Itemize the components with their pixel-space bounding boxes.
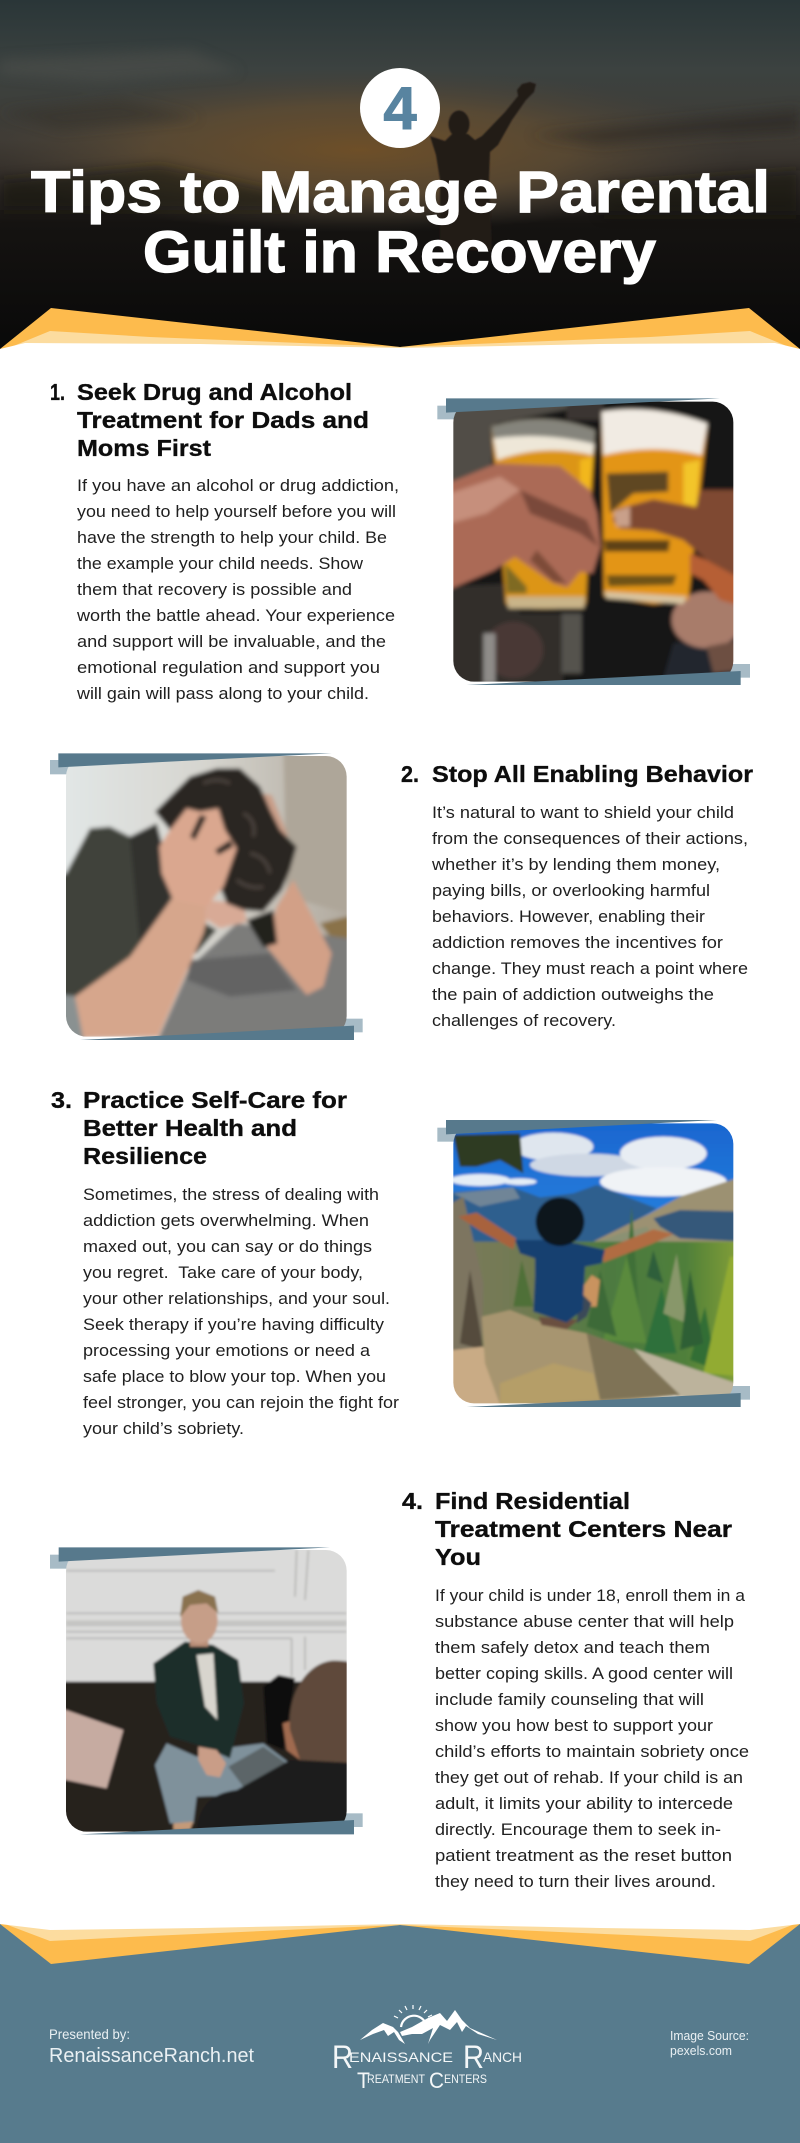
hero banner with photo background (0, 0, 800, 350)
photo: person with open arms on a rock facing mountains (437, 1113, 750, 1407)
panel: tip 4 text (402, 1488, 749, 1891)
tip 3 body text: safe place to blow your top. When you (83, 1368, 386, 1386)
tip 4 body text: they get out of rehab. If your child is an (435, 1769, 743, 1787)
person (458, 1213, 516, 1249)
hand (159, 808, 237, 907)
foot (173, 1822, 193, 1830)
footer: image source: Image Source: (670, 2028, 749, 2043)
tip 1 body text: worth the battle ahead. Your experience (76, 607, 395, 625)
tip 2 body text: whether it’s by lending them money, (431, 856, 720, 874)
right hand (613, 490, 743, 580)
tip 3 number: 3. (51, 1087, 72, 1113)
tip 2 body text (431, 804, 748, 1030)
footer: presented by: RenaissanceRanch.net (49, 2045, 254, 2067)
logo wordmark: ENTERS (444, 2074, 487, 2086)
logo wordmark: ANCH (483, 2049, 522, 2065)
tip 2 heading: Stop All Enabling Behavior (432, 761, 753, 787)
panel: tip 1 text (50, 379, 399, 703)
footer: image source (670, 2028, 749, 2058)
jacket (153, 1642, 244, 1758)
clouds (513, 1133, 593, 1161)
logo wordmark: C (429, 2068, 444, 2093)
tip 1 heading: Moms First (77, 435, 211, 461)
tip 1 heading: Seek Drug and Alcohol (77, 379, 352, 405)
tip 1 body text: them that recovery is possible and (77, 581, 352, 599)
tip 1 body text (76, 477, 399, 703)
logo wordmark: R (463, 2039, 484, 2075)
tip 3 body text: processing your emotions or need a (83, 1342, 371, 1360)
hands (198, 1747, 226, 1777)
left glass (492, 419, 595, 609)
tip 3 heading: Resilience (83, 1143, 207, 1169)
tip 1 body text: and support will be invaluable, and the (77, 633, 386, 651)
tip 4 body text (435, 1587, 749, 1891)
tip 4 body text: better coping skills. A good center will (435, 1665, 733, 1683)
ground (453, 1345, 502, 1404)
tip 3 heading: Better Health and (83, 1115, 297, 1141)
tip 4 heading (435, 1488, 732, 1570)
jeans (155, 1743, 290, 1823)
tip 1 body text: have the strength to help your child. Be (77, 529, 387, 547)
tip 1 heading: Treatment for Dads and (77, 407, 369, 433)
footer: image source: pexels.com (670, 2043, 732, 2058)
far arm (267, 880, 332, 995)
tip 3 body text: Seek therapy if you’re having difficulty (83, 1316, 385, 1334)
photo: young man on a sofa talking with a counselor (50, 1540, 363, 1840)
tip 4 number: 4. (402, 1488, 423, 1514)
tip 4 body text: them safely detox and teach them (435, 1639, 710, 1657)
tip 4 body text: include family counseling that will (435, 1691, 704, 1709)
tip 2 body text: challenges of recovery. (432, 1012, 616, 1030)
icon: sun and mountains (360, 2005, 497, 2044)
footer: presented by (49, 2026, 254, 2067)
tip 2 body text: the pain of addiction outweighs the (432, 986, 714, 1004)
logo wordmark (332, 2039, 522, 2093)
tip 2 body text: It’s natural to want to shield your child (432, 804, 734, 822)
tip 3 heading (83, 1087, 347, 1169)
tip 4 heading: Treatment Centers Near (435, 1516, 732, 1542)
tip 1 body text: the example your child needs. Show (77, 555, 363, 573)
tip 1 body text: emotional regulation and support you (77, 659, 380, 677)
footer background (0, 1920, 800, 2143)
tip 1 heading (77, 379, 369, 461)
tip 3 body text: your other relationships, and your soul. (83, 1290, 390, 1308)
rock (482, 1310, 680, 1405)
tip 4 body text: child’s efforts to maintain sobriety once (435, 1743, 749, 1761)
tip 3 body text: feel stronger, you can rejoin the fight for (83, 1394, 400, 1412)
left hand (440, 463, 601, 593)
tip 4 body text: substance abuse center that will help (435, 1613, 734, 1631)
tree branches (453, 1133, 523, 1173)
tip 3 body text: your child’s sobriety. (83, 1420, 244, 1438)
tip 4 body text: If your child is under 18, enroll them in a (435, 1587, 746, 1605)
hair (260, 792, 288, 837)
forest (472, 1239, 734, 1384)
tip 4 body text: patient treatment as the reset button (435, 1847, 732, 1865)
tip 2 body text: paying bills, or overlooking harmful (432, 882, 710, 900)
tip 1 body text: you need to help yourself before you will (77, 503, 396, 521)
mountains (440, 1185, 657, 1247)
tip 4 body text: directly. Encourage them to seek in- (435, 1821, 721, 1839)
badge: number 4 (360, 68, 440, 148)
near arm (75, 897, 210, 1038)
tip 2 number: 2. (401, 761, 419, 787)
tip 4 body text: show you how best to support your (435, 1717, 714, 1735)
tip 2 body text: change. They must reach a point where (432, 960, 748, 978)
tip 3 body text: Sometimes, the stress of dealing with (83, 1186, 379, 1204)
title (31, 160, 770, 285)
tip 3 body text: maxed out, you can say or do things (83, 1238, 372, 1256)
pillow (66, 1708, 126, 1790)
right glass (602, 409, 707, 604)
sofa (66, 1680, 346, 1832)
tip 4 body text: adult, it limits your ability to intercede (435, 1795, 733, 1813)
head (188, 1640, 210, 1649)
logo wordmark: REATMENT (367, 2074, 425, 2086)
shirt (50, 823, 217, 997)
logo wordmark: ENAISSANCE (349, 2049, 453, 2065)
yellow chevron band under hero (0, 308, 800, 352)
tip 1 number: 1. (50, 379, 65, 405)
title: Guilt in Recovery (143, 220, 656, 285)
tip 2 body text: behaviors. However, enabling their (432, 908, 706, 926)
title: Tips to Manage Parental (31, 160, 770, 225)
tip 4 heading: Find Residential (435, 1488, 630, 1514)
tip 4 body text: they need to turn their lives around. (435, 1873, 716, 1891)
badge: number 4: 4 (383, 75, 417, 142)
tip 4 heading: You (435, 1544, 481, 1570)
tip 1 body text: will gain will pass along to your child. (76, 685, 369, 703)
logo wordmark: R (332, 2039, 353, 2075)
tip 3 body text: addiction gets overwhelming. When (83, 1212, 369, 1230)
photo: man holding his head at a table (50, 747, 363, 1050)
tip 3 heading: Practice Self-Care for (83, 1087, 347, 1113)
tip 3 body text: you regret. Take care of your body, (83, 1264, 363, 1282)
tip 2 body text: from the consequences of their actions, (432, 830, 748, 848)
footer: presented by: Presented by: (49, 2026, 130, 2042)
tip 3 body text (83, 1186, 400, 1438)
counselor (283, 1720, 300, 1760)
bag (263, 1675, 295, 1750)
panel: tip 3 text (51, 1087, 400, 1438)
panel: tip 2 text (401, 761, 753, 1030)
logo wordmark: T (357, 2068, 370, 2093)
forehead (205, 900, 247, 928)
tip 1 body text: If you have an alcohol or drug addiction, (77, 477, 399, 495)
tip 2 body text: addiction removes the incentives for (432, 934, 724, 952)
photo: two hands toasting beer glasses (437, 390, 750, 690)
footer: Renaissance Ranch logo (332, 2005, 522, 2093)
